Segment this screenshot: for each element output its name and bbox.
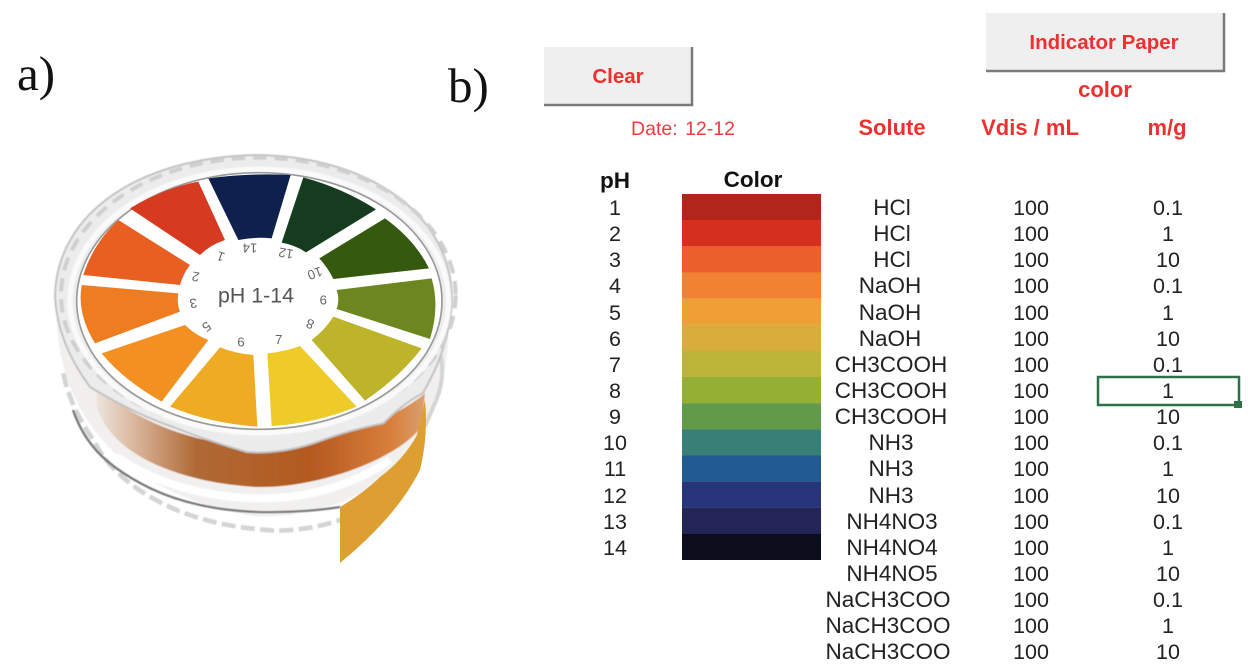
mass column: 1 — [1162, 379, 1174, 403]
solute column: NH4NO3 — [846, 509, 938, 534]
solute column: HCl — [873, 221, 911, 246]
Vdis column: 100 — [1013, 301, 1049, 325]
Vdis column: 100 — [1013, 405, 1049, 429]
Vdis column: 100 — [1013, 588, 1049, 612]
mass column: 0.1 — [1153, 274, 1183, 298]
icon: pH scale wheel wedges — [81, 174, 435, 427]
Vdis column: 100 — [1013, 222, 1049, 246]
label b): b) — [448, 58, 489, 113]
case base ring — [73, 410, 340, 512]
pH column: 11 — [604, 457, 626, 481]
center label: 5 — [199, 318, 214, 335]
center label — [188, 241, 327, 349]
solute column: CH3COOH — [835, 404, 947, 429]
mass column: 1 — [1162, 614, 1174, 638]
pH column: 10 — [603, 431, 627, 455]
center label: 9 — [320, 292, 327, 307]
mass column: 10 — [1156, 640, 1180, 664]
pH column — [603, 196, 627, 560]
column heading: Solute: Solute — [858, 115, 926, 140]
pH column: 4 — [609, 274, 621, 298]
mass column: 1 — [1162, 222, 1174, 246]
Vdis column: 100 — [1013, 274, 1049, 298]
solute column — [825, 195, 951, 664]
solute column: NaCH3COO — [825, 613, 951, 638]
Vdis column: 100 — [1013, 196, 1049, 220]
center label: 12 — [277, 244, 295, 262]
case bottom — [57, 320, 448, 517]
button: Indicator Paper: Indicator Paper — [1029, 31, 1179, 54]
solute column: NH4NO5 — [846, 561, 938, 586]
Vdis column: 100 — [1013, 248, 1049, 272]
Vdis column: 100 — [1013, 327, 1049, 351]
solute column: CH3COOH — [835, 352, 947, 377]
solute column: NaOH — [859, 326, 921, 351]
mass column: 0.1 — [1153, 510, 1183, 534]
mass column: 1 — [1162, 457, 1174, 481]
pH column: 6 — [609, 327, 621, 351]
button: Indicator Paper — [986, 13, 1225, 72]
center label: 7 — [275, 332, 282, 347]
center label: 2 — [191, 268, 201, 285]
column heading: m/g: m/g — [1147, 115, 1187, 140]
Vdis column: 100 — [1013, 640, 1049, 664]
label: color: color — [1078, 77, 1132, 102]
solute column: NH3 — [868, 430, 914, 455]
pH column: 1 — [609, 196, 621, 220]
solute column: NH3 — [868, 483, 914, 508]
mass column: 0.1 — [1153, 353, 1183, 377]
mass column: 10 — [1156, 405, 1180, 429]
center label: 3 — [188, 295, 198, 311]
center label: 10 — [305, 264, 324, 283]
pH column: 5 — [609, 301, 621, 325]
center label: 1 — [215, 248, 227, 265]
mass column: 10 — [1156, 562, 1180, 586]
Vdis column — [1013, 196, 1049, 664]
pH column: 7 — [609, 353, 621, 377]
mass column: 10 — [1156, 327, 1180, 351]
button: Clear — [544, 47, 693, 106]
Vdis column: 100 — [1013, 379, 1049, 403]
column heading: Color: Color — [724, 167, 783, 192]
center label: 14 — [242, 241, 257, 256]
solute column: NH3 — [868, 456, 914, 481]
label a): a) — [17, 46, 55, 101]
Vdis column: 100 — [1013, 484, 1049, 508]
paper roll side — [97, 387, 425, 487]
lower shell highlight — [117, 457, 390, 498]
solute column: NaOH — [859, 273, 921, 298]
Vdis column: 100 — [1013, 562, 1049, 586]
pH column: 3 — [609, 248, 621, 272]
color scale bar — [682, 194, 821, 560]
mass column: 0.1 — [1153, 588, 1183, 612]
center label: 8 — [304, 316, 316, 332]
mass column — [1153, 196, 1183, 664]
pH column: 12 — [603, 484, 627, 508]
solute column: NH4NO4 — [846, 535, 938, 560]
solute column: HCl — [873, 195, 911, 220]
solute column: NaOH — [859, 300, 921, 325]
mass column: 10 — [1156, 484, 1180, 508]
Vdis column: 100 — [1013, 431, 1049, 455]
mass column: 1 — [1162, 301, 1174, 325]
pH column: 8 — [609, 379, 621, 403]
Vdis column: 100 — [1013, 614, 1049, 638]
mass column: 0.1 — [1153, 196, 1183, 220]
pH column: 13 — [603, 510, 627, 534]
solute column: NaCH3COO — [825, 587, 951, 612]
date: Date: 12-12 — [631, 118, 735, 140]
Vdis column: 100 — [1013, 353, 1049, 377]
case rim — [55, 155, 452, 452]
solute column: NaCH3COO — [825, 639, 951, 664]
Vdis column: 100 — [1013, 510, 1049, 534]
column heading: Vdis / mL: Vdis / mL — [981, 115, 1079, 140]
column heading: pH: pH — [600, 168, 630, 193]
photo: pH paper roll in a clear case — [55, 155, 456, 563]
button: Clear: Clear — [592, 65, 644, 88]
mass column: 10 — [1156, 248, 1180, 272]
mass column: 1 — [1162, 536, 1174, 560]
paper strip — [340, 400, 426, 563]
Vdis column: 100 — [1013, 536, 1049, 560]
selected cell — [1098, 377, 1242, 408]
solute column: HCl — [873, 247, 911, 272]
solute column: CH3COOH — [835, 378, 947, 403]
center label: 6 — [237, 334, 245, 349]
pH column: 14 — [603, 536, 627, 560]
mass column: 0.1 — [1153, 431, 1183, 455]
center label: pH 1-14 — [218, 283, 294, 307]
Vdis column: 100 — [1013, 457, 1049, 481]
pH column: 2 — [609, 222, 621, 246]
pH column: 9 — [609, 405, 621, 429]
